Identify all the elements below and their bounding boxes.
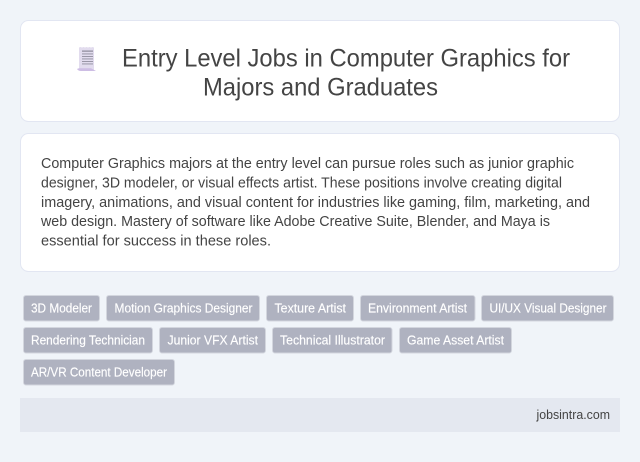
tag: UI/UX Visual Designer — [482, 296, 614, 321]
tag: AR/VR Content Developer: AR/VR Content Developer — [31, 366, 167, 380]
description text: designer, 3D modeler, or visual effects artist. These positions involve creating digital — [41, 176, 562, 192]
tag: Texture Artist — [266, 296, 354, 321]
icon: document scroll — [77, 47, 96, 71]
tag: Motion Graphics Designer — [106, 296, 260, 321]
tag: 3D Modeler: 3D Modeler — [31, 302, 92, 316]
panel: header — [20, 20, 620, 122]
description text: web design. Mastery of software like Adobe Creative Suite, Blender, and Maya is — [40, 214, 550, 230]
description text: Computer Graphics majors at the entry level can pursue roles such as junior graphic — [41, 156, 574, 172]
tag: Motion Graphics Designer: Motion Graphics Designer — [114, 302, 252, 316]
tag: Junior VFX Artist — [160, 328, 266, 353]
tag: Game Asset Artist — [400, 328, 512, 353]
tag: Junior VFX Artist: Junior VFX Artist — [168, 334, 259, 348]
tag: Game Asset Artist: Game Asset Artist — [407, 334, 505, 348]
title: Entry Level Jobs in Computer Graphics for — [122, 44, 570, 72]
tag: Environment Artist: Environment Artist — [368, 302, 468, 316]
title — [122, 44, 570, 102]
description text: essential for success in these roles. — [41, 234, 271, 250]
footer source text: jobsintra.com — [536, 408, 610, 422]
tag: Technical Illustrator: Technical Illustrator — [280, 334, 385, 348]
tag: 3D Modeler — [24, 296, 100, 321]
footer — [20, 398, 620, 432]
tag list — [24, 296, 614, 385]
tag: Rendering Technician — [24, 328, 152, 353]
tag: AR/VR Content Developer — [24, 360, 174, 385]
description text: imagery, animations, and visual content for industries like gaming, film, marketing, and — [41, 195, 590, 211]
description text — [40, 156, 590, 250]
tag: Technical Illustrator — [272, 328, 392, 353]
panel: description — [20, 134, 620, 272]
tag: UI/UX Visual Designer: UI/UX Visual Designer — [490, 302, 606, 316]
tag: Rendering Technician: Rendering Technician — [31, 334, 145, 348]
tag: Texture Artist: Texture Artist — [274, 302, 347, 316]
tag: Environment Artist — [360, 296, 475, 321]
title: Majors and Graduates — [203, 74, 438, 102]
